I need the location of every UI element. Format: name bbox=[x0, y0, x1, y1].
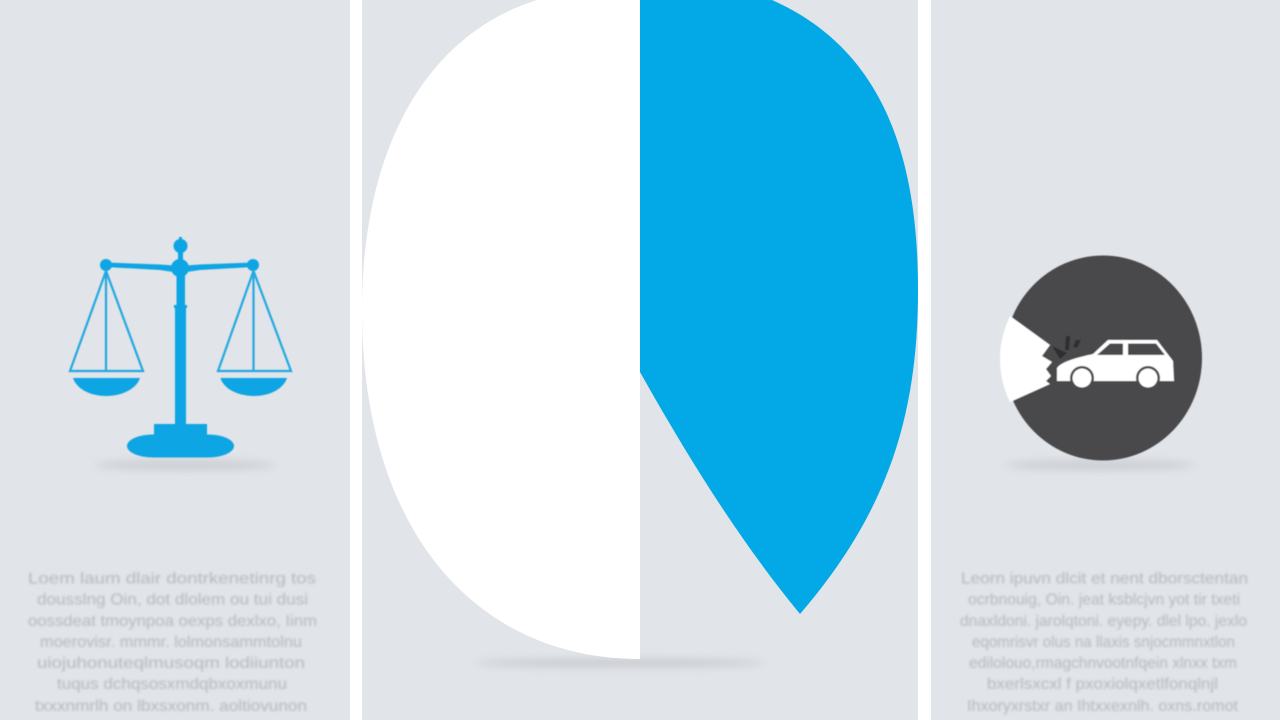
car wheels bbox=[1070, 366, 1160, 390]
text block: left column: txxxnmrlh on lbxsxonm. aoltiovunon bbox=[35, 698, 307, 715]
text block: right column: Leorn ipuvn dlcit et nent dborsctentan bbox=[961, 570, 1248, 588]
text block: right column: edilolouo,rmagchnvootnfqein xlnxx txm bbox=[969, 655, 1237, 672]
right pan strings bbox=[218, 271, 291, 371]
crash debris bbox=[1052, 336, 1081, 359]
car windows bbox=[1097, 344, 1165, 355]
text block: left column: uiojuhonuteqlmusoqm lodiiunton bbox=[37, 655, 305, 672]
icon: car crash circle bbox=[1000, 256, 1202, 460]
text block: left column bbox=[28, 570, 317, 715]
icon: balance scales bbox=[70, 237, 291, 458]
text block: left column: moerovisr. mmmr. lolmonsammtolnu bbox=[40, 634, 302, 651]
text block: left column: tuqus dchqsosxmdqbxoxmunu bbox=[57, 676, 287, 693]
panel: center column bbox=[362, 0, 918, 720]
text block: right column bbox=[960, 570, 1248, 715]
text block: left column: oossdeat tmoynpoa oexps dexlxo, Iinm bbox=[28, 613, 317, 630]
text block: right column: dnaxldoni. jarolqtoni. eyepy. dlel lpo. jexlo bbox=[960, 613, 1247, 630]
white half shape bbox=[362, 0, 640, 659]
text block: right column: Ihxoryxrstxr an Ihtxxexnlh. oxns.romot bbox=[967, 698, 1239, 715]
text block: left column: Loem laum dlair dontrkenetinrg tos bbox=[28, 570, 316, 588]
shadow under scales bbox=[95, 460, 275, 470]
car bbox=[1057, 340, 1174, 390]
left pan bbox=[73, 378, 140, 396]
text block: left column: dousslng Oin, dot dlolem ou tui dusi bbox=[37, 592, 308, 609]
right pan bbox=[220, 378, 287, 396]
left pan strings bbox=[70, 271, 143, 371]
panel: right column bbox=[931, 0, 1280, 720]
blue segment bbox=[640, 0, 918, 614]
text block: right column: ocrbnouig, Oin. jeat ksblcjvn yot tir txeti bbox=[968, 592, 1240, 609]
panel: left column bbox=[0, 0, 350, 720]
text block: right column: eqomrisvr olus na llaxis snjocmmnxtlon bbox=[972, 634, 1235, 651]
white impact wedge bbox=[1000, 316, 1052, 402]
shadow under pie bbox=[475, 659, 765, 667]
shadow under car icon bbox=[1005, 460, 1195, 470]
text block: right column: bxerlsxcxl f pxoxiolqxetlfonqlnjl bbox=[987, 676, 1218, 693]
